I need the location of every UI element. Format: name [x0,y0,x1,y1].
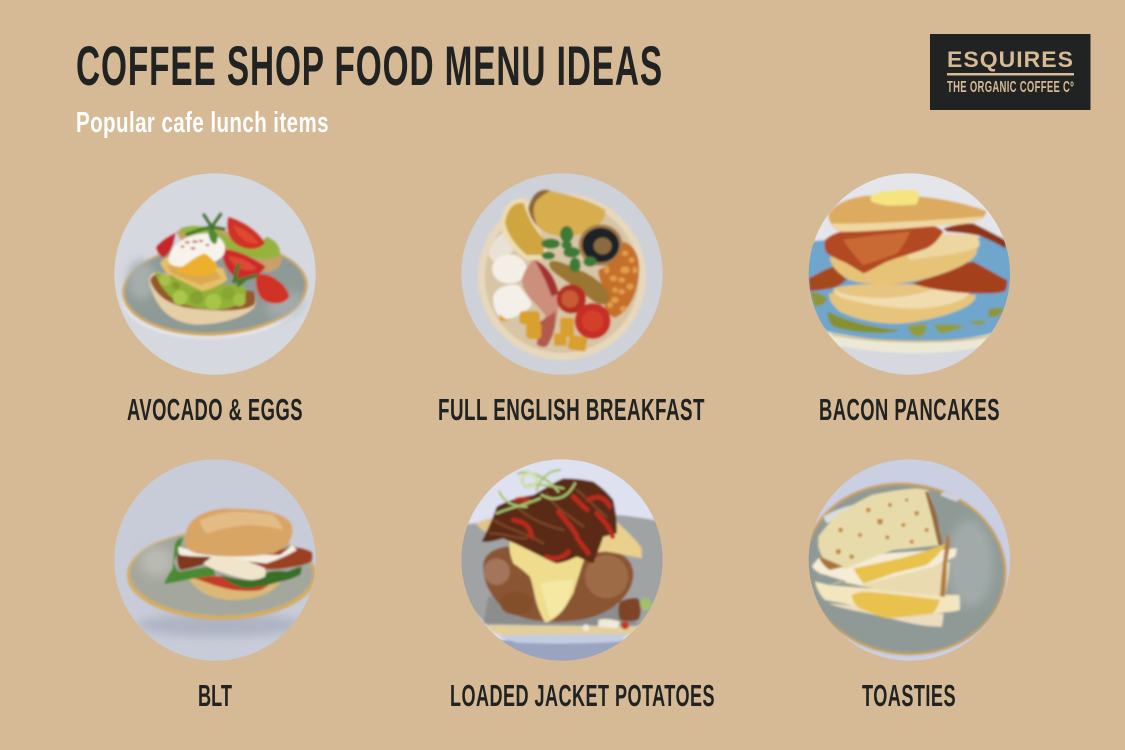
label: BLT: BLT [198,678,232,713]
label: bacon pancakes: BACON PANCAKES [819,392,1000,427]
logo: Esquires [930,34,1090,110]
logo: Esquires: ESQUIRES [947,47,1074,72]
label: full English breakfast: FULL ENGLISH BREAKFAST [438,392,705,427]
label: toasties: TOASTIES [862,678,956,713]
title: COFFEE SHOP FOOD MENU IDEAS [76,34,663,97]
photo: avocado and eggs [114,173,316,375]
subtitle: Popular cafe lunch items [76,107,329,139]
photo: BLT [114,459,316,661]
label: loaded jacket potatoes: LOADED JACKET POTATOES [450,678,715,713]
photo: toasties [808,459,1010,661]
photo: full English breakfast [461,173,663,375]
label: avocado and eggs: AVOCADO & EGGS [127,392,303,427]
photo: bacon pancakes [808,173,1010,375]
photo: loaded jacket potatoes [461,459,663,661]
